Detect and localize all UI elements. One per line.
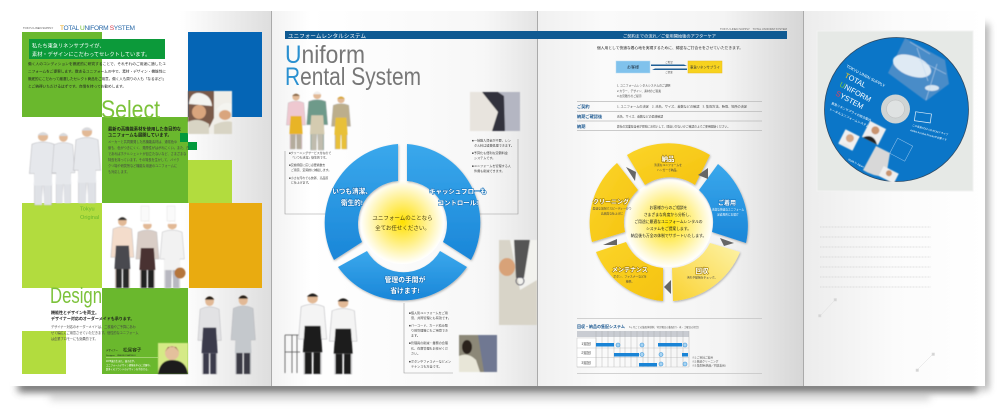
- segment: hygiene: いつも清潔、: [332, 186, 372, 196]
- steps list: 2.カラー、デザイン、素材のご提案: [617, 89, 661, 93]
- schedule table: 3巡回: [581, 360, 591, 365]
- segment: delivery: 清潔なユニフォームを: [654, 163, 682, 167]
- schedule title: 回収・納品の集配システム: [577, 323, 625, 329]
- photo: office meeting: [459, 335, 497, 372]
- cycle centre: ご用途に最適なユニフォームレンタルの: [634, 219, 703, 224]
- title: [285, 41, 421, 91]
- contract table: ご契約: [577, 103, 590, 110]
- callout box: bottom: ます。: [411, 332, 420, 338]
- address lines: [820, 227, 931, 287]
- segment: collection: 回収: [696, 267, 709, 275]
- disc title: SYSTEM: [834, 89, 865, 111]
- disc title: トータルユニフォームシステム: [829, 106, 870, 128]
- header logo: TOKYU LINEN SUPPLY: [23, 26, 53, 30]
- section header bar: ユニフォームレンタルシステム: [288, 32, 366, 40]
- cycle centre: さまざまな角度から分析し、: [644, 212, 693, 217]
- design body text: [51, 309, 138, 341]
- cycle centre: システムをご提案します。: [646, 226, 691, 231]
- disc title: TOTAL: [843, 71, 868, 90]
- schedule title: [577, 323, 699, 329]
- ring centre: [360, 180, 444, 264]
- segment: cleaning: クリーニング: [593, 198, 629, 206]
- disc title: UNIFORM: [838, 80, 873, 104]
- photo: hard hat workers: [188, 91, 232, 134]
- section header bar: [285, 31, 537, 40]
- design body text: デザイナー対応のオーダーメイドは、二枚袖やご予算にあわ: [51, 324, 136, 329]
- heading band: 私たち東急リネンサプライが、: [32, 42, 105, 50]
- panel: uniform rental system: [271, 11, 537, 386]
- contract table: [577, 102, 762, 130]
- select body text: メーカーと共同開発した高機能素材は、通常色ゆ: [108, 139, 177, 144]
- flow diagram: ご提案: [665, 70, 673, 74]
- photo: business women: [198, 295, 255, 374]
- segment: wearing: [699, 164, 748, 243]
- callout box: right: ■予算化も便利な定額料金: [472, 150, 508, 155]
- callout box: right: ■ユニフォームを管理する人: [472, 163, 511, 168]
- flow diagram: お客様: [627, 64, 639, 70]
- callout box: bottom: [404, 303, 453, 373]
- segment: management: [338, 251, 467, 300]
- designer profile: 1975東京生まれ。東京在学。: [106, 359, 136, 363]
- schedule table: [577, 331, 689, 367]
- photo: uniform detail: [470, 92, 520, 131]
- steps list: 3.お見積りのご提示: [617, 94, 642, 98]
- contract table: 納期: [577, 123, 585, 130]
- cycle centre: 納品後も万全の体制でサポートいたします。: [631, 233, 706, 238]
- collection schedule: [577, 318, 762, 374]
- select body text: 優も、色がつきにくく、発塵性がはがれにくい。また、白: [108, 145, 189, 150]
- intro text: 働く人のコンディションを徹底的に研究することで、それぞれのご用途に適したユ: [28, 61, 166, 66]
- contract table: 氏名、サイズ、着数などの最終確認: [617, 114, 663, 118]
- callout box: left: に仕上げます。: [291, 180, 311, 184]
- design heading: Design: [50, 283, 102, 308]
- heading band: [29, 39, 165, 59]
- brand line: TOKYU LINEN SUPPLY TOTAL UNIFORM SYSTEM: [720, 27, 787, 31]
- select body text: ユニフォームも展開しています。: [108, 132, 172, 138]
- callout box: left: [285, 150, 340, 214]
- schedule legend: [692, 356, 726, 368]
- designer profile: 松尾容子: [123, 346, 142, 354]
- callout box: right: システムです。: [474, 155, 495, 160]
- section header bar: ご契約までの流れ／ご使用開始後のアフターケア: [623, 32, 716, 40]
- segment: collection: [672, 243, 740, 301]
- segment: cash flow: コントロール!: [438, 199, 478, 207]
- ring centre: 全てお任せください。: [375, 224, 430, 232]
- designer profile: ユニフォームデザイン経験を中心に活躍中。: [106, 363, 152, 367]
- header logo: [23, 25, 135, 32]
- callout box: left: ■クリーニングサービス付なので: [289, 150, 331, 155]
- header logo: TOTAL UNIFORM SYSTEM: [60, 25, 135, 32]
- tokyu original label: Tokyu: [80, 206, 95, 212]
- segment: maintenance: 補修。: [626, 280, 634, 284]
- segment: cleaning: 高品質な仕上げに: [601, 212, 623, 216]
- segment: maintenance: ボタン、ファスナーなどを: [613, 274, 647, 278]
- intro text: ニフォームをご提案します。数あるユニフォームの中で、素材・デザイン・機能性に: [28, 68, 166, 74]
- flow diagram: [616, 60, 722, 74]
- diagram: blue benefit ring: [325, 144, 487, 300]
- callout box: left: ■交換頻度に応じ必要着数を: [289, 162, 326, 167]
- callout box: bottom: 意、共同管理にも有効です。: [411, 315, 451, 320]
- flow diagram: 東急リネンサプライ: [690, 64, 720, 70]
- diagram: service cycle ring: [590, 143, 748, 301]
- cycle arrows: [603, 167, 734, 294]
- designer profile: Designer YASUKO MATSUO: [106, 354, 136, 357]
- designer profile: 数多くのブランドのデザインを手掛ける。: [106, 367, 150, 371]
- callout box: bottom: り別管理等にもご用意でき: [411, 328, 448, 332]
- design body text: デザイナー対応のオーダーメイドも承ります。: [51, 315, 134, 321]
- segment: cash flow: [407, 144, 487, 260]
- callout box: left: ご用意、定期的に補給します。: [291, 167, 331, 172]
- intro text: とご納得いただけるはずです。自信を持ってお勧めします。: [28, 84, 126, 88]
- callout box: right: タル料は経費処理できます。: [474, 142, 514, 148]
- panel: select and design: [10, 11, 271, 386]
- segment: wearing: 清潔な快適なユニフォーム: [712, 208, 744, 212]
- select body text: クリ場や研究所など機能な用途のユニフォームに: [108, 163, 177, 168]
- photo: chefs: [111, 206, 186, 288]
- select body text: も対応します。: [108, 169, 130, 174]
- schedule table: 2巡回: [581, 350, 591, 355]
- photo: key and hand: [499, 240, 537, 325]
- cd logo and notes: Made in Japan: [848, 157, 865, 169]
- crop marks: [818, 298, 934, 372]
- cd logo and notes: Adobe Acrobat Readerが必要です: [910, 128, 948, 142]
- sky grid photo: [888, 38, 949, 101]
- segment: delivery: ハンガーで納品。: [657, 168, 679, 172]
- title: Uniform: [285, 41, 365, 69]
- intro text: 徹底的にこだわって厳選したセレクト商品をご用意。働く人も周りの人も「なるほど!」: [28, 76, 166, 81]
- segment: collection: 汚れや破損をチェック。: [687, 276, 717, 280]
- design body text: 機能性とデザインを両立。: [51, 309, 99, 315]
- cd disc: [824, 38, 968, 184]
- flow diagram: ご希望: [665, 60, 673, 64]
- ring centre: ユニフォームのことなら: [372, 215, 433, 222]
- cd logo and notes: この音楽CDは CD-ROMドライブ: [912, 123, 949, 137]
- cycle centre: [624, 179, 712, 267]
- photo: cleanroom suits: [29, 127, 101, 205]
- segment: delivery: 納品: [662, 154, 674, 163]
- callout box: bottom: ■バーコード、カード読み取: [409, 322, 449, 328]
- design body text: は企業プロモーにも効果的です。: [51, 336, 98, 341]
- select heading: Select: [101, 96, 160, 124]
- designer profile: [106, 346, 158, 371]
- steps list: 1. ユニフォームレンタルシステムのご説明: [617, 84, 670, 88]
- segment: maintenance: [596, 242, 663, 301]
- segment: maintenance: メンテナンス: [612, 267, 648, 274]
- segment: cleaning: [590, 163, 638, 242]
- callout box: bottom: ■ボタンやファスナーなどメン: [409, 358, 451, 364]
- segment: management: 省けます!: [390, 286, 420, 295]
- contract table: 1. ユニフォームの決定 2. 氏名、サイズ、着数などの確認 3. 集配方法、時間、場所の決定: [617, 104, 747, 108]
- design body text: せて幅広にご用意させていただきます。個性的なユニフォーム: [51, 330, 138, 335]
- callout box: right: 件費も削減できます。: [474, 168, 505, 173]
- photo: restaurant staff: [285, 293, 357, 374]
- lead text: 個人用として快適な着心地を実現するために、綿密なご打合せをさせていただきます。: [597, 45, 743, 50]
- plastic sleeve: [817, 31, 973, 191]
- segment: wearing: 定着場所にお届け: [717, 212, 739, 216]
- schedule title: 3ヶ月ごとの集配体制例、特定曜日の集配(月・木・土曜日の場合): [629, 325, 699, 329]
- segment: delivery: [627, 143, 710, 185]
- segment: hygiene: 衛生的!: [341, 198, 363, 207]
- disc title: 東急リネンサプライの総合案内: [831, 100, 872, 123]
- schedule legend: ※1:ご来社ご着用: [692, 356, 713, 360]
- photo: designer portrait: [158, 343, 188, 374]
- segment: management: 管理の手間が: [385, 275, 426, 284]
- photo: rental uniforms staff: [286, 92, 351, 150]
- contract table: 納期ご確認後: [577, 113, 603, 120]
- disc portraits: [838, 121, 899, 184]
- callout box: bottom: さい。: [411, 350, 420, 356]
- select body text: 最新の高機能素材を使用した各目的な: [108, 126, 182, 132]
- schedule legend: ※3:集配時(納品／回収着用): [692, 364, 726, 368]
- intro text: [28, 61, 166, 88]
- designer profile: デザイナー: [106, 348, 119, 352]
- panel: cd pocket: [803, 11, 985, 386]
- section header bar: [537, 31, 787, 40]
- colour blocks: [22, 32, 262, 374]
- tokyu original label: Original: [80, 215, 99, 221]
- segment: cash flow: キャッシュフローも: [429, 188, 487, 196]
- schedule legend: ※2:徹底クリーニング: [692, 360, 719, 364]
- callout box: bottom: テナンスも万全です。: [411, 364, 442, 368]
- heading band: 素材・デザインにこだわってセレクトしています。: [32, 50, 150, 58]
- callout box: left: 「いつも清潔」衛生的です。: [291, 154, 328, 160]
- segment: hygiene: [325, 144, 398, 260]
- callout box: right: ■一括購入資金が不要、レン: [472, 138, 511, 142]
- select body text: であればホテルシェントが目立たないなど、さまざまな: [108, 151, 186, 156]
- cd logo and notes: [848, 112, 949, 169]
- segment: wearing: ご着用: [718, 199, 736, 207]
- steps list: [617, 84, 670, 98]
- cycle centre: お客様からのご相談を: [650, 205, 688, 210]
- contract table: 弊社の営業担当者が現地にお伺いして、間違いがないかご確認の上でご使用開始ください。: [617, 124, 730, 128]
- callout box: right: [466, 138, 518, 214]
- title: Rental System: [285, 63, 421, 91]
- callout box: bottom: ■個人別ユニフォームをご用: [409, 310, 448, 315]
- schedule table: 1巡回: [581, 341, 591, 346]
- hub: [881, 94, 910, 124]
- select body text: 特長を持っています。その特長を生かして、バイク: [108, 157, 179, 162]
- disc title: TOKYU LINEN SUPPLY: [846, 63, 886, 88]
- callout box: bottom: ■管理員の削減・業務の合理: [409, 340, 448, 345]
- tokyu original label: [80, 206, 99, 221]
- disc title: [829, 63, 886, 128]
- callout box: bottom: 化、在庫管理もお任せくだ: [411, 346, 448, 350]
- segment: cleaning: 最適な溶剤でスピーディーかつ: [593, 206, 632, 210]
- select body text: [108, 126, 189, 174]
- callout box: left: ■小さな汚れでも放置、高品質: [289, 175, 328, 180]
- panel: contract flow and aftercare: [537, 11, 803, 386]
